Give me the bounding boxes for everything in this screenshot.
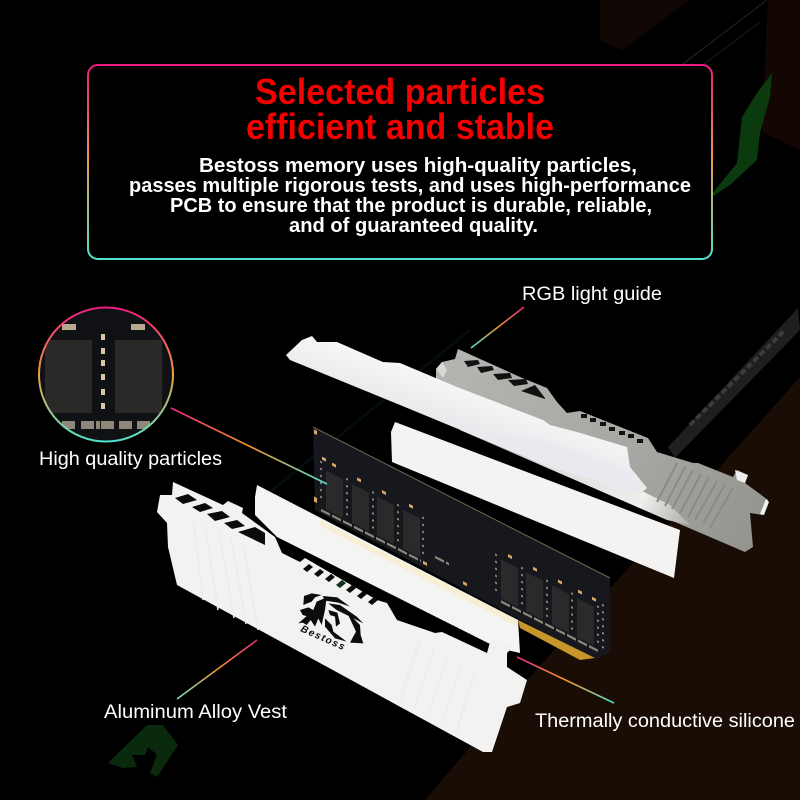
panel: headline box	[88, 65, 712, 259]
label: high quality particles: High quality particles	[39, 449, 222, 470]
pointer: RGB light guide	[471, 307, 524, 348]
pointer: thermal silicone	[517, 657, 614, 703]
heading: efficient and stable	[246, 106, 554, 147]
heading: Selected particles	[255, 71, 545, 112]
memory module	[313, 427, 610, 660]
body text	[129, 155, 691, 237]
body text: PCB to ensure that the product is durable, reliable,	[170, 195, 652, 217]
label: RGB light guide: RGB light guide	[522, 284, 662, 305]
pointer: aluminum vest	[177, 640, 257, 699]
thermal pad: left	[255, 485, 520, 653]
circle: particle close-up	[38, 307, 174, 443]
heading	[246, 71, 554, 147]
body text: Bestoss memory uses high-quality particles,	[199, 155, 637, 177]
light guide	[286, 336, 647, 494]
pointer: particles	[171, 408, 327, 484]
icon: lion logo	[298, 593, 363, 643]
metal plate	[436, 349, 769, 552]
thermal pad: right	[391, 422, 680, 578]
vest vent slots	[175, 494, 378, 605]
logo wordmark: Bestoss	[299, 624, 347, 653]
body text: passes multiple rigorous tests, and uses high-performance	[129, 175, 691, 197]
body text: and of guaranteed quality.	[289, 215, 538, 237]
aluminum vest	[157, 482, 527, 752]
label: aluminum alloy vest: Aluminum Alloy Vest	[104, 702, 288, 723]
label: thermally conductive silicone: Thermally conductive silicone	[535, 711, 795, 732]
